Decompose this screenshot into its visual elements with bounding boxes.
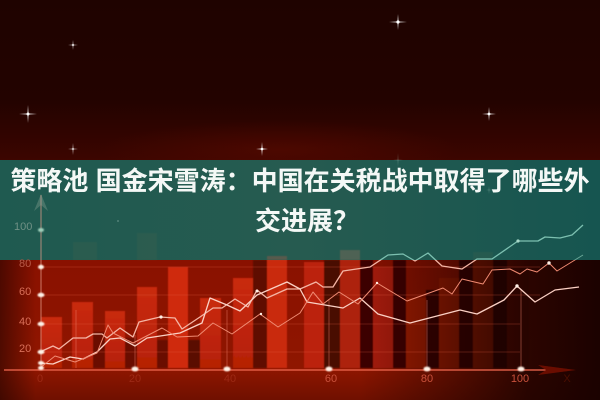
star 5 bbox=[68, 143, 78, 155]
title: 策略池 国金宋雪涛：中国在关税战中取得了哪些外 bbox=[10, 166, 590, 196]
x axis labels: 0 bbox=[37, 373, 43, 385]
y axis labels bbox=[14, 221, 32, 355]
faint band stars bbox=[117, 153, 492, 222]
x axis bbox=[4, 365, 576, 375]
x axis labels: 80 bbox=[421, 373, 433, 385]
y axis labels: 20 bbox=[19, 343, 31, 355]
star 2 bbox=[68, 40, 78, 50]
x axis labels: 60 bbox=[325, 373, 337, 385]
bars poking into band bbox=[267, 250, 360, 260]
line series: middle bbox=[40, 282, 579, 364]
axis arrowhead bbox=[538, 365, 576, 375]
x axis labels: 20 bbox=[129, 373, 141, 385]
title: 交进展？ bbox=[255, 206, 359, 236]
star 4 bbox=[482, 107, 496, 121]
y axis labels: 60 bbox=[19, 286, 31, 298]
horizontal grid lines bbox=[41, 267, 540, 352]
x axis labels: 40 bbox=[224, 373, 236, 385]
bar chart bbox=[41, 250, 529, 368]
x axis labels bbox=[37, 373, 571, 385]
faint band bars bbox=[73, 233, 493, 260]
star 6 bbox=[256, 142, 268, 156]
x axis labels: 100 bbox=[511, 373, 529, 385]
title bbox=[10, 166, 590, 236]
stars bbox=[19, 14, 496, 156]
y axis bbox=[34, 194, 48, 370]
y axis labels: 100 bbox=[14, 221, 32, 233]
y axis labels: 80 bbox=[19, 258, 31, 270]
line markers bbox=[159, 239, 551, 319]
star 3 bbox=[19, 105, 37, 123]
line series: upper bbox=[40, 225, 583, 352]
star 1 bbox=[389, 14, 407, 30]
axis arrowhead bbox=[34, 194, 48, 211]
line series: thin bbox=[40, 255, 583, 368]
y axis labels: 40 bbox=[19, 316, 31, 328]
drop lines bbox=[76, 290, 521, 368]
edge shading bbox=[0, 160, 600, 400]
x axis labels: X bbox=[563, 373, 571, 385]
teal title band bbox=[0, 160, 600, 260]
data point dots bbox=[38, 228, 524, 371]
